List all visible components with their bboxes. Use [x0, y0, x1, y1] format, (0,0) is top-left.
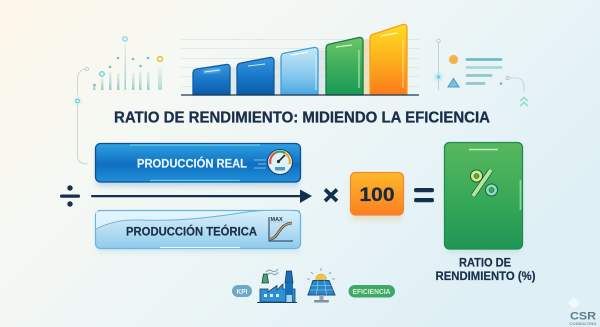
logo: CSR Consulting: CSR	[570, 310, 596, 322]
EFICIENCIA pill: EFICIENCIA	[352, 289, 390, 296]
KPI pill	[232, 285, 252, 297]
left sparkline decoration	[93, 37, 162, 90]
bar chart	[181, 24, 419, 95]
bar 3	[281, 47, 318, 95]
KPI pill: KPI	[236, 287, 248, 296]
EFICIENCIA pill	[348, 285, 395, 298]
chart baseline	[181, 94, 419, 96]
bar 2	[237, 57, 274, 95]
connector line left	[74, 68, 88, 164]
label: PRODUCCIÓN TEÓRICA	[126, 224, 257, 238]
icon: solar panel	[307, 268, 335, 302]
number box 100: 100	[360, 185, 394, 206]
panel: produccion real	[96, 144, 300, 186]
bar 1	[193, 64, 230, 95]
icon: max curve: MAX	[270, 217, 283, 223]
bar 4	[326, 37, 363, 95]
result label: RENDIMIENTO (%)	[436, 269, 536, 283]
right decoration	[435, 39, 528, 106]
multiply sign	[325, 190, 337, 201]
division symbol	[60, 185, 80, 207]
label: PRODUCCIÓN REAL	[137, 156, 247, 170]
arrow	[91, 190, 312, 203]
result label	[436, 256, 536, 283]
panel: result	[444, 142, 522, 252]
icon: percent	[470, 170, 498, 196]
result label: RATIO DE	[459, 256, 511, 270]
panel: produccion teorica	[96, 210, 300, 252]
icon: gauge	[254, 150, 292, 174]
equals sign	[414, 188, 434, 202]
chevrons	[520, 98, 528, 106]
bar 5	[370, 24, 407, 95]
logo: CSR Consulting	[568, 297, 597, 326]
logo: CSR Consulting: CONSULTING	[570, 322, 597, 326]
icon: factory	[257, 269, 297, 302]
icon: max curve	[269, 217, 293, 241]
number box 100	[350, 172, 404, 220]
title: RATIO DE RENDIMIENTO: MIDIENDO LA EFICIENCIA	[114, 110, 490, 126]
